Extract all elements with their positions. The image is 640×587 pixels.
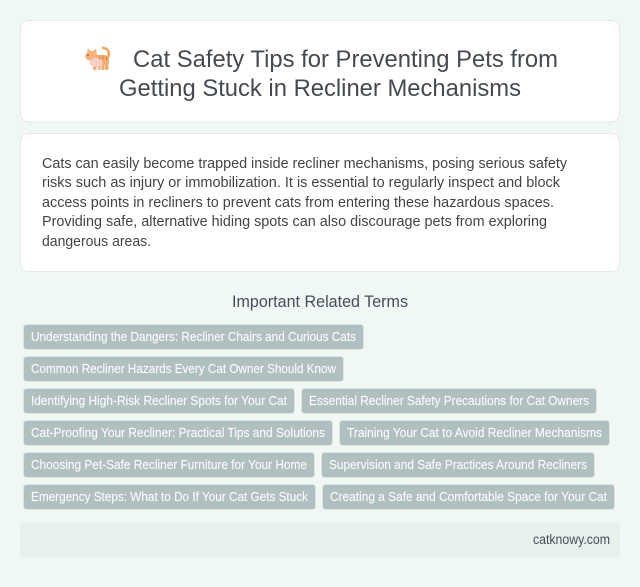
- panel: title card: [20, 20, 620, 122]
- title line 2: Getting Stuck in Recliner Mechanisms: [119, 75, 521, 102]
- summary line 5: dangerous areas.: [42, 234, 151, 250]
- tag: understanding the dangers: Understanding the Dangers: Recliner Chairs and Curious Cats: [31, 330, 356, 344]
- summary line 2: risks such as injury or immobilization. It is essential to regularly inspect and block: [42, 175, 561, 191]
- tag: high-risk spots: [24, 388, 294, 414]
- footer source: catknowy.com: [533, 532, 610, 547]
- tag: understanding the dangers: [24, 324, 364, 350]
- tag: safety precautions: Essential Recliner Safety Precautions for Cat Owners: [309, 394, 589, 408]
- tags group: [24, 324, 614, 510]
- tag: choosing furniture: Choosing Pet-Safe Recliner Furniture for Your Home: [31, 458, 307, 472]
- heading: important related terms: Important Related Terms: [232, 293, 408, 311]
- tag: common hazards: Common Recliner Hazards Every Cat Owner Should Know: [31, 362, 337, 376]
- icon: cat: [85, 48, 109, 70]
- tag: supervision: Supervision and Safe Practices Around Recliners: [329, 458, 587, 472]
- summary line 1: Cats can easily become trapped inside recliner mechanisms, posing serious safety: [42, 156, 568, 172]
- tag: cat-proofing: Cat-Proofing Your Recliner: Practical Tips and Solutions: [31, 426, 325, 440]
- footer: [20, 523, 620, 557]
- summary line 3: access points in recliners to prevent cats from entering these hazardous spaces.: [42, 195, 554, 211]
- tag: emergency steps: [24, 484, 316, 510]
- tag: high-risk spots: Identifying High-Risk Recliner Spots for Your Cat: [31, 394, 287, 408]
- tag: common hazards: [24, 356, 344, 382]
- summary line 4: Providing safe, alternative hiding spots can also discourage pets from exploring: [42, 214, 547, 230]
- tag: choosing furniture: [24, 452, 314, 478]
- tag: supervision: [322, 452, 594, 478]
- tag: safe space: [322, 484, 614, 510]
- tag: safety precautions: [302, 388, 596, 414]
- tag: training: Training Your Cat to Avoid Recliner Mechanisms: [347, 426, 602, 440]
- tag: safe space: Creating a Safe and Comfortable Space for Your Cat: [330, 490, 607, 504]
- tag: emergency steps: Emergency Steps: What to Do If Your Cat Gets Stuck: [31, 490, 309, 504]
- title line 1: Cat Safety Tips for Preventing Pets from: [133, 46, 558, 73]
- tag: cat-proofing: [24, 420, 332, 446]
- tag: training: [340, 420, 610, 446]
- panel: summary card: [20, 134, 620, 272]
